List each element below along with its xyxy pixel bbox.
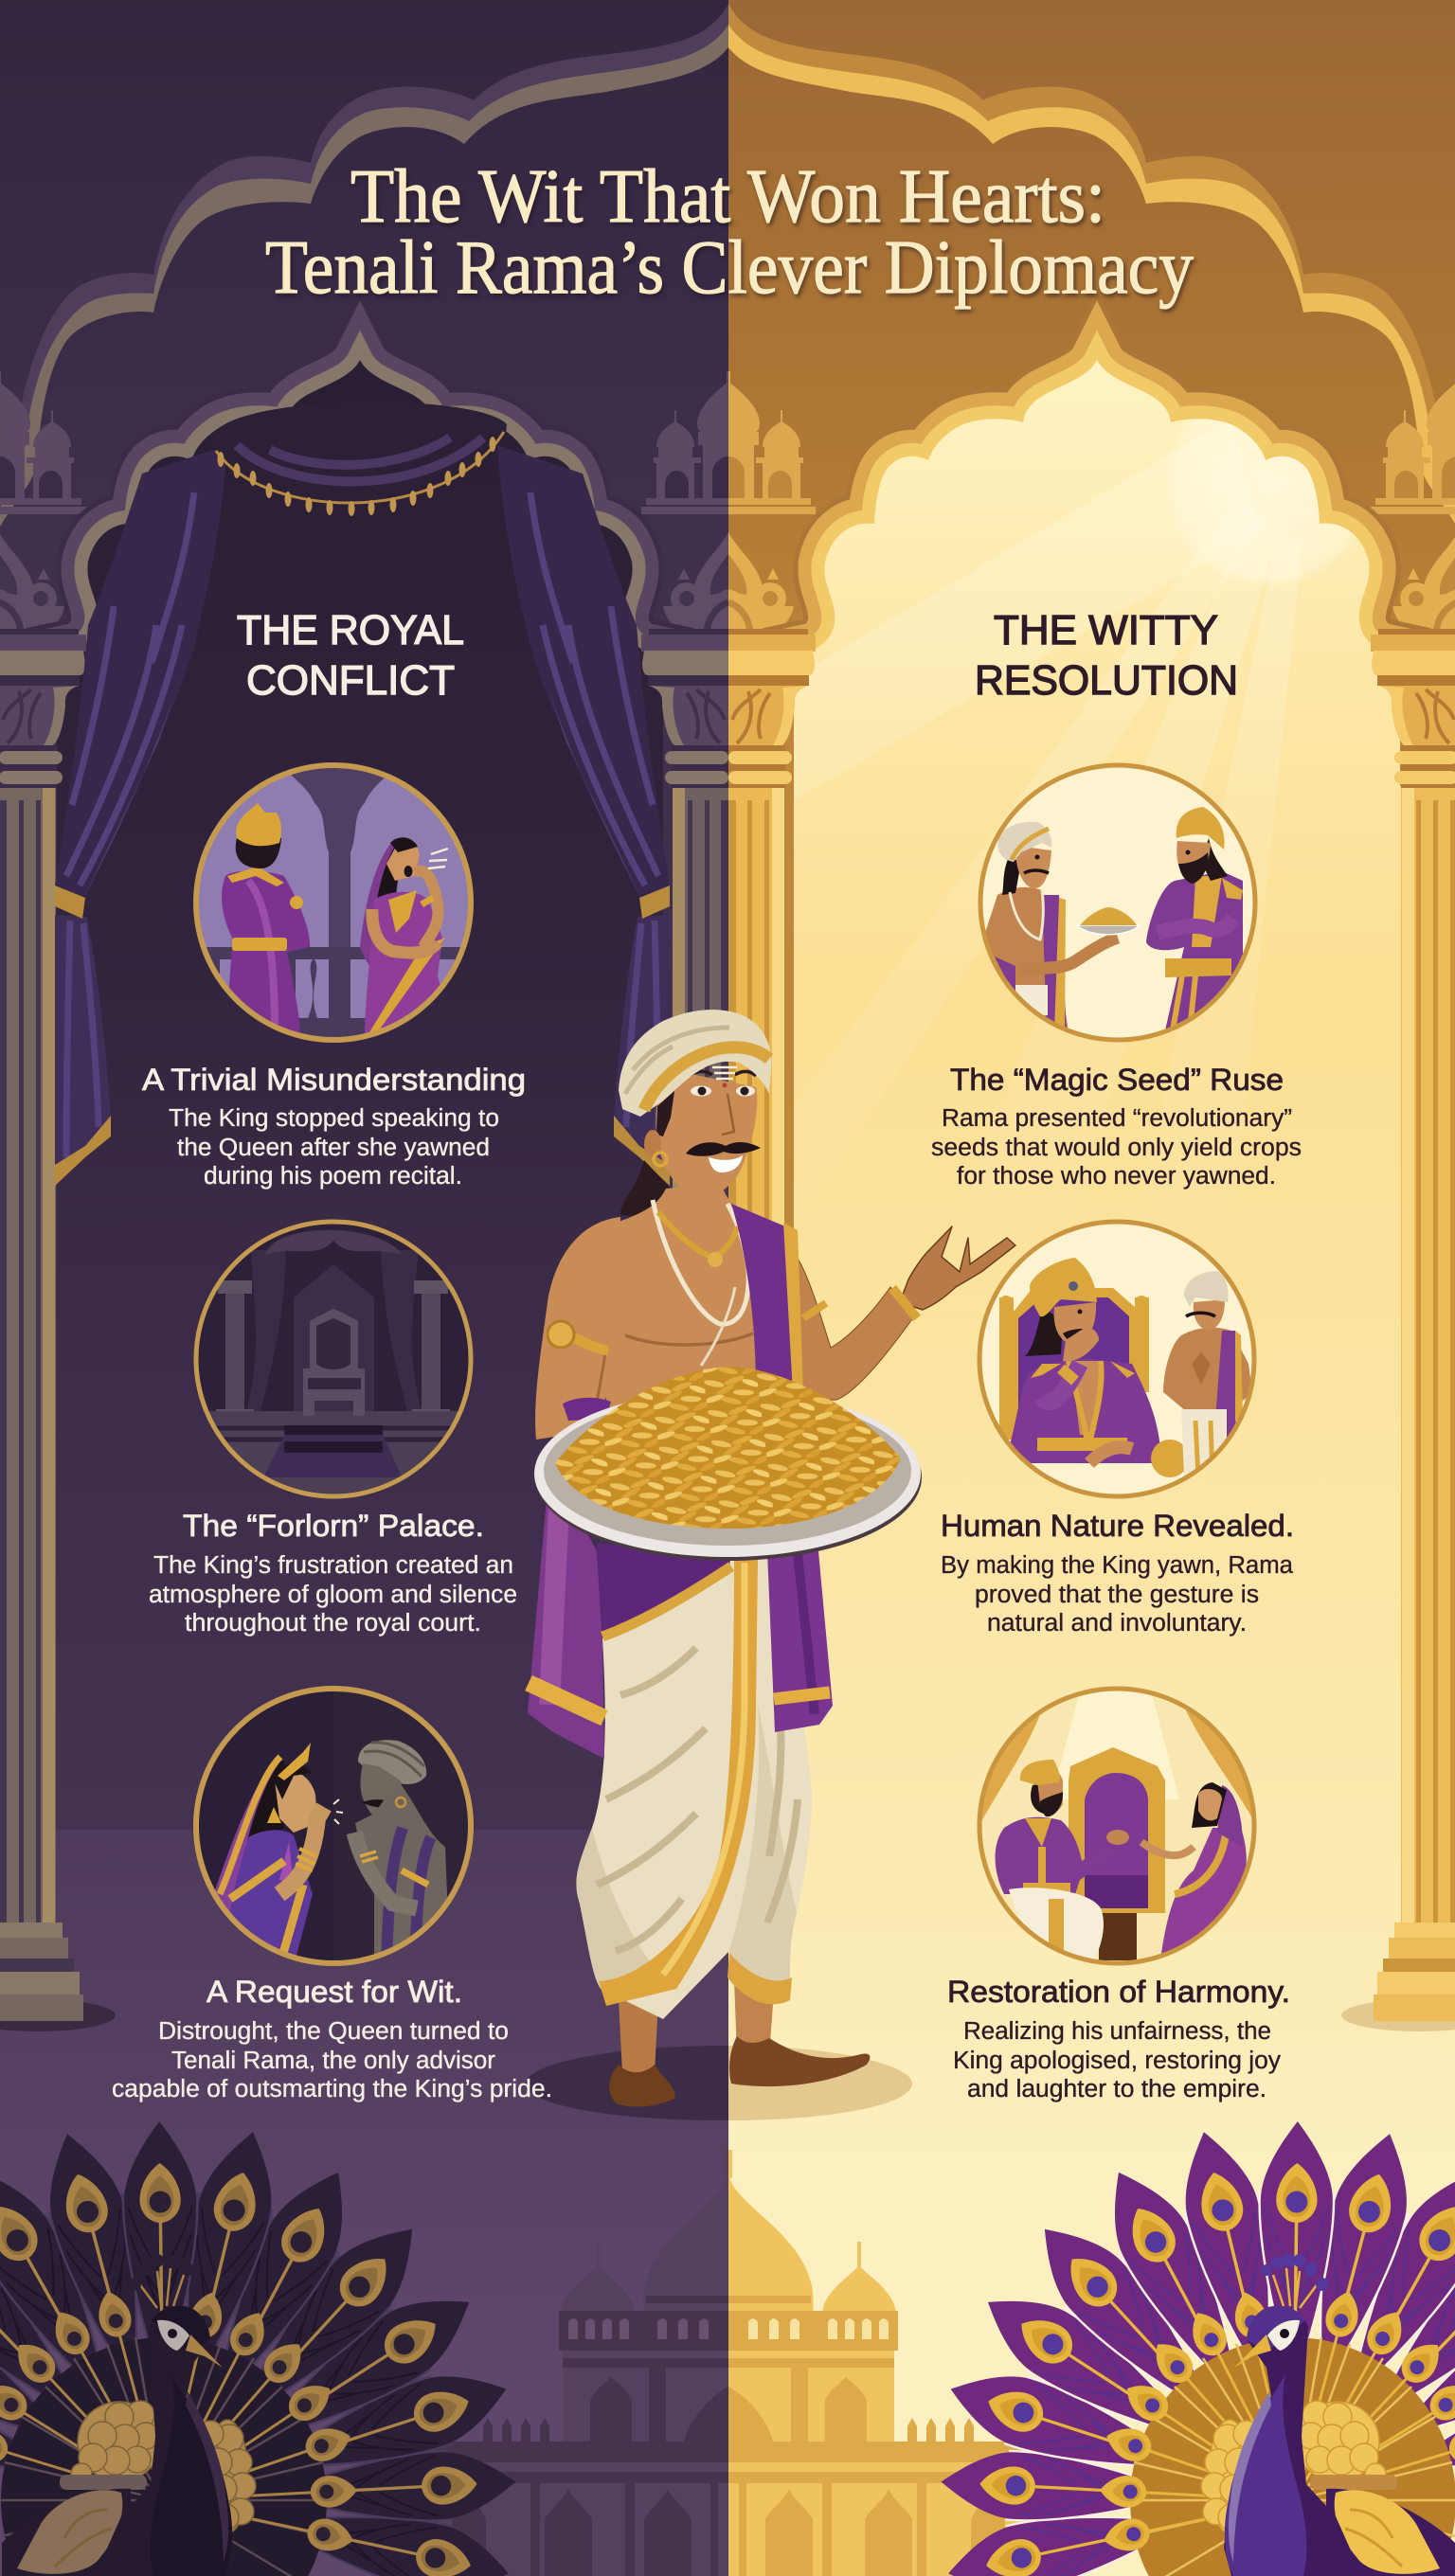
text block: Human Nature Revealed: natural and involuntary.	[987, 1610, 1247, 1637]
text block: A Trivial Misunderstanding	[142, 1063, 526, 1190]
background: golden right half	[728, 0, 1455, 2576]
medallion 5: the King yawns	[979, 1221, 1255, 1497]
peacock, left	[0, 2121, 517, 2576]
gold ring	[196, 1689, 471, 1963]
text block: The Forlorn Palace	[149, 1509, 517, 1637]
right curtain	[497, 445, 670, 1186]
palace silhouettes, right	[728, 371, 1455, 514]
floral carvings, left	[0, 532, 728, 632]
text block: A Trivial Misunderstanding: the Queen after she yawned	[177, 1135, 490, 1161]
text block: Human Nature Revealed	[941, 1509, 1294, 1637]
pillar shaft, right centre	[728, 788, 784, 1269]
dhoti	[576, 1559, 812, 2019]
text block: The Forlorn Palace: throughout the royal court.	[185, 1610, 481, 1637]
pile of golden seeds	[555, 1367, 901, 1529]
text block: Restoration of Harmony: Restoration of Harmony.	[947, 1975, 1290, 2009]
necklaces	[653, 1200, 748, 1366]
sun and rays	[786, 377, 1375, 1326]
text block: The Magic Seed Ruse	[931, 1063, 1302, 1190]
text block: Restoration of Harmony: King apologised, restoring joy	[953, 2048, 1281, 2074]
gold ring	[980, 765, 1255, 1040]
section heading: The Royal Conflict	[237, 607, 464, 704]
right arm and gesturing hand	[779, 1226, 1015, 1402]
pillar shaft, left edge	[0, 788, 116, 2031]
bottom palace, left	[417, 2150, 728, 2576]
pillar shaft, right edge	[1341, 788, 1455, 2031]
floor, left	[0, 1830, 728, 2576]
shoes	[609, 2036, 870, 2106]
left palace architecture	[0, 4, 729, 2576]
section heading: The Royal Conflict: THE ROYAL	[237, 607, 464, 653]
left drape	[528, 1496, 604, 1759]
text block: A Request for Wit	[112, 1975, 552, 2102]
text block: Human Nature Revealed: Human Nature Revealed.	[941, 1509, 1294, 1543]
text block: The Forlorn Palace: The King’s frustration created an	[153, 1552, 513, 1579]
text block: The Magic Seed Ruse: for those who never yawned.	[957, 1163, 1276, 1190]
text block: A Request for Wit: Distrought, the Queen turned to	[158, 2018, 509, 2045]
pillar capitals, left	[0, 629, 728, 789]
back hair	[620, 1160, 671, 1216]
section heading: The Witty Resolution: THE WITTY	[994, 607, 1218, 653]
section heading: The Witty Resolution	[975, 607, 1238, 704]
shoulder shawl	[731, 1204, 803, 1394]
text block: A Request for Wit: A Request for Wit.	[207, 1975, 462, 2009]
title: Tenali Rama’s Clever Diplomacy	[265, 226, 1194, 310]
floral carvings, right	[728, 532, 1455, 632]
text block: Restoration of Harmony: Realizing his unfairness, the	[963, 2018, 1271, 2045]
room below the pillars, left	[57, 653, 663, 1837]
medallion 3: Queen whispers to Tenali Rama	[195, 1686, 476, 1966]
text block: A Request for Wit: capable of outsmarting the King’s pride.	[112, 2076, 552, 2102]
pillar shaft, left centre	[673, 788, 728, 1188]
figure shadow on floor	[526, 2046, 912, 2120]
text block: A Trivial Misunderstanding: during his poem recital.	[204, 1163, 462, 1190]
gold ring	[196, 765, 471, 1040]
inner arch frame, left	[26, 301, 694, 649]
valance with gold tassels	[213, 402, 507, 516]
palace silhouettes, left	[0, 371, 729, 514]
text block: Human Nature Revealed: By making the King yawn, Rama	[941, 1552, 1294, 1579]
text block: The Magic Seed Ruse: seeds that would only yield crops	[931, 1135, 1302, 1161]
pillar capitals, right	[728, 629, 1455, 789]
torso	[596, 1184, 781, 1411]
silver plate	[534, 1390, 922, 1561]
text block: Human Nature Revealed: proved that the gesture is	[975, 1582, 1259, 1608]
text block: A Request for Wit: Tenali Rama, the only advisor	[171, 2048, 496, 2074]
gold ring	[196, 1222, 471, 1496]
text block: A Trivial Misunderstanding: A Trivial Misunderstanding	[142, 1063, 526, 1097]
gold ring	[979, 1222, 1254, 1496]
turban	[619, 1010, 771, 1117]
medallion 1: King turns away, Queen yawns	[194, 763, 473, 1042]
left arm	[535, 1217, 620, 1440]
head	[644, 1067, 761, 1197]
left curtain	[55, 445, 227, 1186]
section heading: The Royal Conflict: CONFLICT	[246, 657, 455, 704]
gold ring	[979, 1689, 1254, 1963]
bottom palace, right	[728, 2150, 1040, 2576]
medallion 4: the magic seed ruse	[979, 764, 1256, 1041]
waist sash	[597, 1544, 734, 1637]
right palace architecture	[728, 4, 1455, 2576]
peacock, right	[940, 2121, 1455, 2576]
chest shading	[625, 1333, 753, 1345]
medallion 6: harmony restored	[976, 1688, 1260, 1964]
text block: Restoration of Harmony: and laughter to the empire.	[967, 2076, 1266, 2102]
inner arch frame, right	[794, 360, 1400, 1894]
text block: The Magic Seed Ruse: The “Magic Seed” Ruse	[950, 1063, 1284, 1097]
text block: The Forlorn Palace: The “Forlorn” Palace.	[183, 1509, 484, 1543]
background: dark left half	[0, 0, 728, 2576]
inner window glow	[728, 360, 1455, 2576]
room fill, left	[83, 360, 644, 653]
outer scalloped arch, left	[0, 4, 728, 527]
section heading: The Witty Resolution: RESOLUTION	[975, 657, 1238, 704]
title: The Wit That Won Hearts:	[350, 155, 1105, 239]
text block: The Magic Seed Ruse: Rama presented “revolutionary”	[942, 1105, 1292, 1132]
right drape	[767, 1551, 833, 1732]
outer scalloped arch, right	[728, 4, 1455, 527]
central figure: Tenali Rama holding a plate of seeds	[528, 1010, 1015, 2106]
title	[265, 155, 1194, 310]
medallion 2: the forlorn throne room	[194, 1220, 473, 1498]
legs	[619, 1979, 775, 2074]
text block: A Trivial Misunderstanding: The King stopped speaking to	[169, 1105, 499, 1132]
text block: Restoration of Harmony	[947, 1975, 1290, 2102]
text block: The Forlorn Palace: atmosphere of gloom and silence	[149, 1582, 517, 1608]
